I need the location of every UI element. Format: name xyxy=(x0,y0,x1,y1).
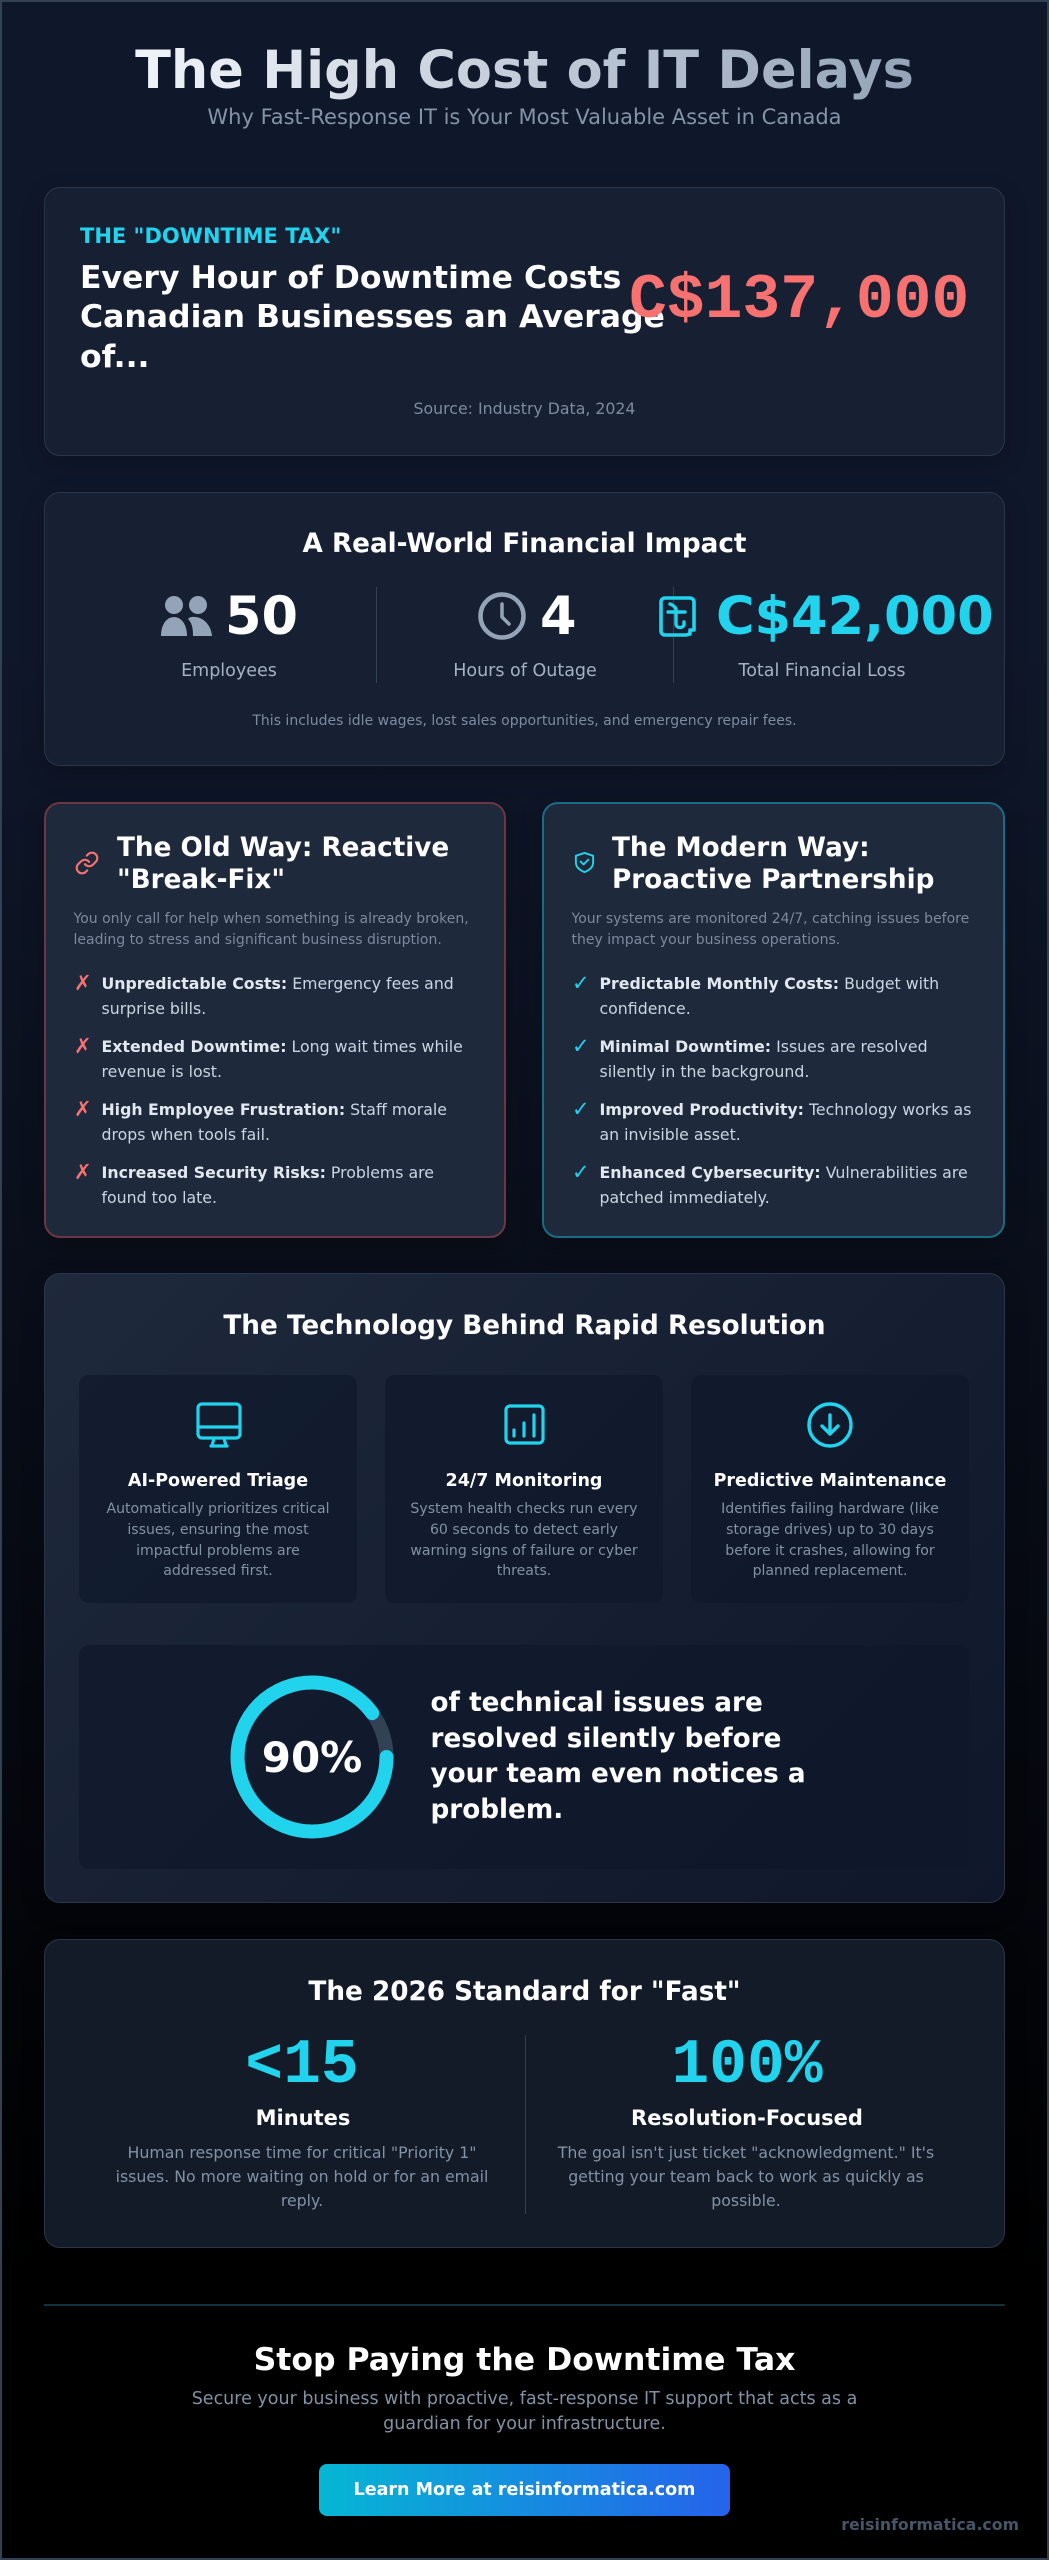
list item: Predictable Monthly Costs: Budget with xyxy=(600,974,939,992)
icon: monitor xyxy=(196,1402,242,1448)
list item: ✗ xyxy=(74,970,92,994)
description: leading to stress and significant business disruption. xyxy=(74,932,442,948)
title: Predictive Maintenance xyxy=(714,1471,946,1491)
stat: loss xyxy=(659,586,994,680)
text: threats. xyxy=(497,1563,551,1579)
list item xyxy=(74,1034,463,1080)
text xyxy=(410,1501,638,1579)
text: issues. No more waiting on hold or for an email xyxy=(116,2167,488,2186)
list item: ✓ xyxy=(572,1034,590,1058)
list item: revenue is lost. xyxy=(102,1062,222,1080)
title: Minutes xyxy=(256,2106,350,2130)
text xyxy=(106,1501,330,1579)
value: <15 xyxy=(245,2030,359,2101)
CTA text: Secure your business with proactive, fast-response IT support that acts as a xyxy=(192,2389,857,2409)
stat: outage xyxy=(453,586,597,680)
panel: old way xyxy=(44,802,506,1238)
list item: surprise bills. xyxy=(102,998,206,1018)
list item: Minimal Downtime: Issues are resolved xyxy=(600,1036,928,1056)
list item: High Employee Frustration: Staff morale xyxy=(102,1100,447,1118)
list item: Improved Productivity: Technology works as xyxy=(600,1100,971,1118)
text: System health checks run every xyxy=(410,1501,638,1517)
CTA text: guardian for your infrastructure. xyxy=(383,2414,666,2434)
list item: ✗ xyxy=(74,1160,92,1184)
CTA button xyxy=(319,2464,730,2516)
eyebrow label: THE "DOWNTIME TAX" xyxy=(80,224,341,248)
list item: Unpredictable Costs: Emergency fees and xyxy=(102,974,454,992)
icon: chart xyxy=(504,1404,545,1445)
stat: employees xyxy=(161,586,298,680)
label: Total Financial Loss xyxy=(738,660,906,680)
stat text: of technical issues are xyxy=(430,1688,763,1718)
icon: download circle xyxy=(807,1402,853,1448)
divider xyxy=(376,587,377,683)
text: issues, ensuring the most xyxy=(127,1522,309,1538)
panel: 90 percent stat xyxy=(79,1645,969,1869)
icon: dollar tag xyxy=(659,596,696,637)
icon: people xyxy=(161,596,212,636)
title: AI-Powered Triage xyxy=(128,1471,308,1491)
headline xyxy=(80,260,665,375)
list item: Enhanced Cybersecurity: Vulnerabilities are xyxy=(600,1162,968,1182)
panel: 2026 standard xyxy=(44,1939,1005,2248)
divider line xyxy=(44,2304,1005,2306)
list item: patched immediately. xyxy=(600,1188,770,1206)
list item xyxy=(74,1160,434,1206)
panel: financial impact xyxy=(44,492,1005,766)
list item: ✓ xyxy=(572,970,590,994)
list item: drops when tools fail. xyxy=(102,1124,270,1144)
heading xyxy=(612,833,934,895)
description xyxy=(572,911,969,948)
panel: modern way xyxy=(542,802,1005,1238)
value: 50 xyxy=(225,586,298,647)
CTA text xyxy=(192,2389,857,2434)
heading: A Real-World Financial Impact xyxy=(302,529,746,559)
label: Hours of Outage xyxy=(453,660,597,680)
cost figure: C$137,000 xyxy=(629,265,969,336)
description: You only call for help when something is already broken, xyxy=(74,911,469,927)
text: warning signs of failure or cyber xyxy=(410,1543,638,1559)
value: 4 xyxy=(540,586,577,647)
list item: an invisible asset. xyxy=(600,1124,741,1144)
heading: The Modern Way: xyxy=(612,833,870,863)
CTA heading: Stop Paying the Downtime Tax xyxy=(254,2342,795,2378)
heading: Proactive Partnership xyxy=(612,865,934,895)
donut chart: 90%: 90% xyxy=(262,1733,362,1782)
list item: confidence. xyxy=(600,998,691,1018)
list item xyxy=(572,1160,968,1206)
subtitle: Why Fast-Response IT is Your Most Valuable Asset in Canada xyxy=(207,105,842,129)
icon: clock xyxy=(478,592,526,640)
text: The goal isn't just ticket "acknowledgment." It's xyxy=(558,2143,934,2162)
icon: broken link xyxy=(76,852,98,874)
text: storage drives) up to 30 days xyxy=(726,1522,934,1538)
label: Employees xyxy=(181,660,277,680)
donut chart: 90% xyxy=(230,1676,394,1838)
description: they impact your business operations. xyxy=(572,932,840,948)
list item xyxy=(572,1034,928,1080)
footnote: This includes idle wages, lost sales opportunities, and emergency repair fees. xyxy=(252,713,797,729)
text: possible. xyxy=(711,2191,781,2210)
column: resolution xyxy=(558,2030,934,2210)
source note: Source: Industry Data, 2024 xyxy=(414,399,635,418)
stat text xyxy=(430,1688,806,1825)
text: Identifies failing hardware (like xyxy=(721,1501,939,1517)
list item: ✗ xyxy=(74,1034,92,1058)
text: getting your team back to work as quickly as xyxy=(568,2167,924,2186)
title: 24/7 Monitoring xyxy=(446,1471,602,1491)
heading: The 2026 Standard for "Fast" xyxy=(308,1977,741,2007)
stat text: resolved silently before xyxy=(430,1724,781,1754)
divider xyxy=(525,2035,526,2214)
list item: Increased Security Risks: Problems are xyxy=(102,1162,434,1182)
text: reply. xyxy=(281,2191,323,2210)
list item xyxy=(74,1096,447,1144)
text: Human response time for critical "Priority 1" xyxy=(128,2143,476,2162)
text: impactful problems are xyxy=(136,1543,300,1559)
list item: Extended Downtime: Long wait times while xyxy=(102,1036,463,1056)
description: Your systems are monitored 24/7, catching issues before xyxy=(572,911,969,927)
icon: shield xyxy=(574,852,594,873)
heading xyxy=(117,833,449,895)
panel: technology xyxy=(44,1273,1005,1903)
list item: ✓ xyxy=(572,1160,590,1184)
CTA button: Learn More at reisinformatica.com xyxy=(354,2480,695,2500)
value: C$42,000 xyxy=(716,586,994,647)
headline: Canadian Businesses an Average xyxy=(80,299,665,335)
text: planned replacement. xyxy=(753,1563,907,1579)
value: 100% xyxy=(671,2030,823,2101)
stat text: problem. xyxy=(430,1795,563,1825)
heading: "Break-Fix" xyxy=(117,865,285,895)
description xyxy=(74,911,469,948)
list item xyxy=(572,1096,971,1144)
text: before it crashes, allowing for xyxy=(725,1543,935,1559)
list item xyxy=(572,970,939,1018)
list item: silently in the background. xyxy=(600,1062,809,1080)
list item: found too late. xyxy=(102,1188,217,1206)
card: AI triage xyxy=(79,1375,357,1603)
card: predictive maintenance xyxy=(691,1375,969,1603)
text: addressed first. xyxy=(163,1563,273,1579)
heading: The Technology Behind Rapid Resolution xyxy=(223,1310,826,1340)
list item: ✓ xyxy=(572,1096,590,1120)
heading: The Old Way: Reactive xyxy=(117,833,449,863)
headline: Every Hour of Downtime Costs xyxy=(80,260,621,296)
list item xyxy=(74,970,454,1018)
stat text: your team even notices a xyxy=(430,1759,806,1789)
column: minutes xyxy=(116,2030,488,2210)
text xyxy=(116,2143,488,2210)
title: The High Cost of IT Delays xyxy=(135,40,914,101)
divider xyxy=(673,587,674,683)
text: Automatically prioritizes critical xyxy=(106,1501,330,1517)
text xyxy=(558,2143,934,2210)
card: monitoring xyxy=(385,1375,663,1603)
list item: ✗ xyxy=(74,1096,92,1120)
title: Resolution-Focused xyxy=(631,2106,863,2130)
text: 60 seconds to detect early xyxy=(430,1522,618,1538)
text xyxy=(721,1501,939,1579)
watermark: reisinformatica.com xyxy=(841,2515,1019,2534)
panel: downtime tax xyxy=(44,187,1005,456)
headline: of... xyxy=(80,339,150,375)
